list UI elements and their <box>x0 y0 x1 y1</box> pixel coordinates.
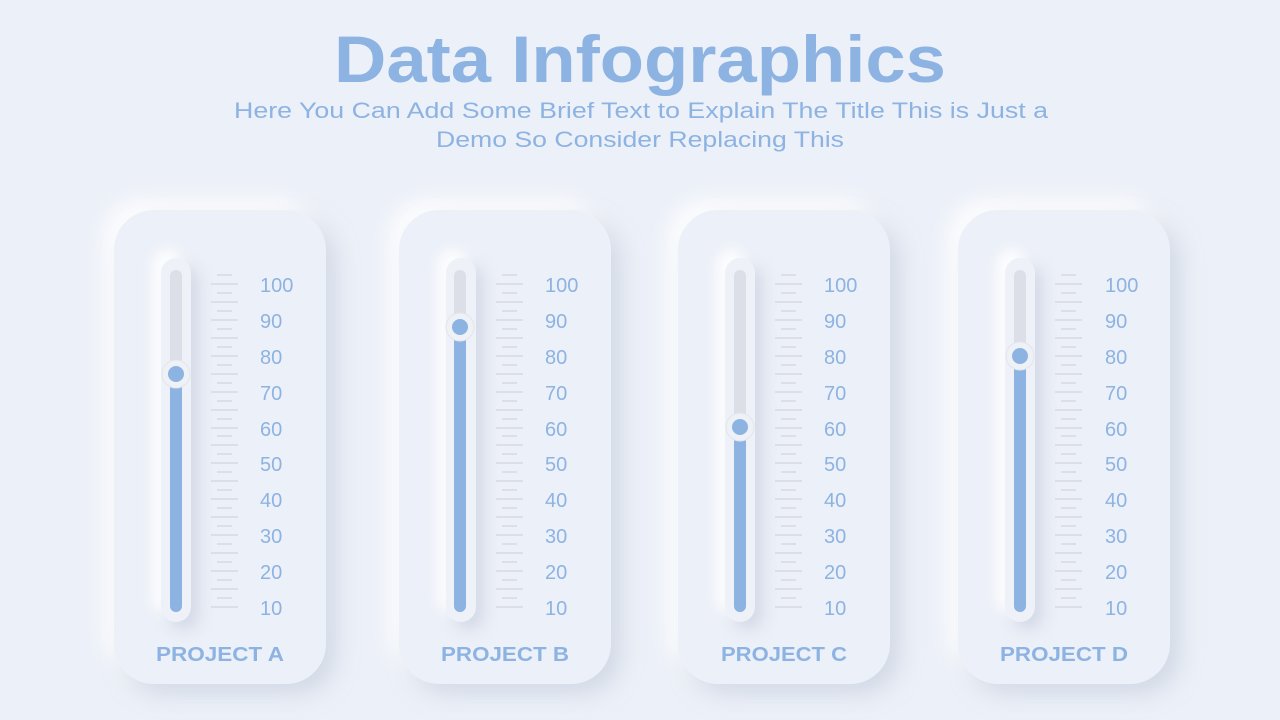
gauge: project B <box>441 270 578 666</box>
gauge: project A: 60 <box>260 419 282 441</box>
gauge: project B: 30 <box>545 526 567 548</box>
gauge: project D: 60 <box>1105 419 1127 441</box>
title: Data Infographics <box>334 22 946 96</box>
gauge: project A: 70 <box>260 383 282 405</box>
subtitle: Here You Can Add Some Brief Text to Explain The Title This is Just a <box>234 98 1049 123</box>
gauge: project A: 100 <box>260 275 293 297</box>
gauge: project C: 100 <box>824 275 857 297</box>
gauge: project C: PROJECT C <box>721 644 847 666</box>
gauge: project A: PROJECT A <box>156 644 284 666</box>
gauge: project A: 20 <box>260 562 282 584</box>
gauge: project B: 50 <box>545 454 567 476</box>
gauge: project A: 30 <box>260 526 282 548</box>
gauge: project A: 80 <box>260 347 282 369</box>
gauge: project C: 10 <box>824 598 846 620</box>
gauge: project B: 80 <box>545 347 567 369</box>
card: project D <box>958 210 1170 684</box>
gauge: project D <box>1000 270 1138 666</box>
gauge: project B: 60 <box>545 419 567 441</box>
gauge: project D: 40 <box>1105 490 1127 512</box>
gauge: project B: 40 <box>545 490 567 512</box>
gauge: project D: 10 <box>1105 598 1127 620</box>
gauge: project C <box>721 270 857 666</box>
gauge: project D: PROJECT D <box>1000 644 1128 666</box>
subtitle <box>234 98 1049 152</box>
card: project B <box>399 210 611 684</box>
gauge: project B: 70 <box>545 383 567 405</box>
gauge: project B: 100 <box>545 275 578 297</box>
gauge: project C: 30 <box>824 526 846 548</box>
gauge: project D: 100 <box>1105 275 1138 297</box>
gauge: project C: 60 <box>824 419 846 441</box>
gauge: project A: 10 <box>260 598 282 620</box>
gauge: project D: 30 <box>1105 526 1127 548</box>
gauge: project B: 20 <box>545 562 567 584</box>
gauge: project A: 50 <box>260 454 282 476</box>
gauge: project D: 90 <box>1105 311 1127 333</box>
gauge: project C: 50 <box>824 454 846 476</box>
gauge: project D: 20 <box>1105 562 1127 584</box>
gauge: project D: 50 <box>1105 454 1127 476</box>
gauge: project C: 90 <box>824 311 846 333</box>
gauge: project B: 90 <box>545 311 567 333</box>
subtitle: Demo So Consider Replacing This <box>436 127 844 152</box>
gauge: project A: 90 <box>260 311 282 333</box>
gauge: project D: 70 <box>1105 383 1127 405</box>
gauge: project A <box>156 270 293 666</box>
gauge: project B: 10 <box>545 598 567 620</box>
card: project C <box>678 210 890 684</box>
gauge: project A: 40 <box>260 490 282 512</box>
gauge: project B: PROJECT B <box>441 644 569 666</box>
gauge: project C: 70 <box>824 383 846 405</box>
gauge: project D: 80 <box>1105 347 1127 369</box>
gauge: project C: 20 <box>824 562 846 584</box>
card: project A <box>114 210 326 684</box>
gauge: project C: 80 <box>824 347 846 369</box>
gauge: project C: 40 <box>824 490 846 512</box>
